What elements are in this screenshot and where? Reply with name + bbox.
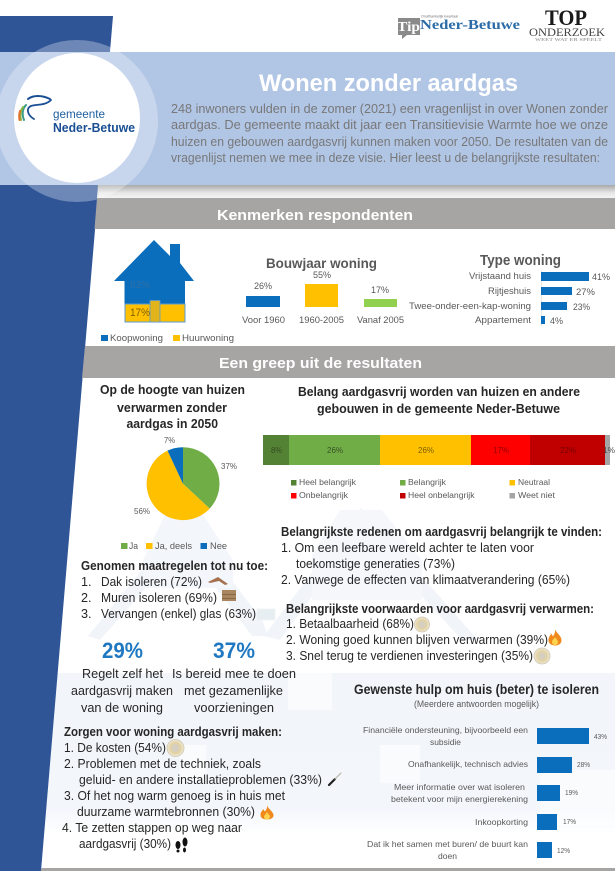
house chart: koop/huur: 17% xyxy=(130,307,150,319)
text: zorgen: 2. Problemen met de techniek, zoals xyxy=(64,757,261,771)
stacked bar chart: 1% xyxy=(603,445,615,455)
stacked bar legend xyxy=(291,477,556,500)
chart values: 43% xyxy=(594,732,607,741)
section band: Een greep uit de resultaten: Een greep uit de resultaten xyxy=(219,355,422,372)
text: voorwaarden xyxy=(286,602,594,663)
stacked bar legend: Neutraal xyxy=(518,477,550,487)
text: zorgen: duurzame warmtebronnen (30%) xyxy=(77,805,255,819)
icon: coin xyxy=(534,648,550,664)
text: redenen: 2. Vanwege de effecten van klimaatverandering (65%) xyxy=(281,573,570,587)
stacked bar chart: 8% xyxy=(271,445,282,455)
chart subtitle: (Meerdere antwoorden mogelijk) xyxy=(414,699,539,709)
stacked bar legend: Onbelangrijk xyxy=(299,490,349,500)
icon: footprints xyxy=(176,838,188,852)
chart values: 19% xyxy=(565,788,578,797)
logo: Top Onderzoek: ONDERZOEK xyxy=(529,25,605,39)
hero panel xyxy=(0,52,615,198)
section band: Kenmerken respondenten xyxy=(94,198,615,229)
text: zorgen: aardgasvrij (30%) xyxy=(79,837,171,851)
chart: Type woning: Vrijstaand huis xyxy=(469,271,531,281)
intro text xyxy=(171,101,609,165)
text: redenen: toekomstige generaties (73%) xyxy=(296,557,455,571)
stat text xyxy=(71,667,173,715)
chart: Type woning: Twee-onder-een-kap-woning xyxy=(409,301,531,311)
house huurwoning xyxy=(125,300,185,322)
stat text: met gezamenlijke xyxy=(184,684,283,698)
chart values: 17% xyxy=(563,817,576,826)
house legend xyxy=(101,333,234,343)
text: zorgen: geluid- en andere installatieproblemen (33%) xyxy=(79,773,322,787)
logo: Top Onderzoek: TOP xyxy=(545,5,587,30)
stat text: aardgasvrij maken xyxy=(71,684,173,698)
chart labels: betekent voor mijn energierekening xyxy=(391,794,528,804)
chart: Bouwjaar woning: 1960-2005 xyxy=(299,314,344,325)
text: genomen maatregelen xyxy=(81,559,268,621)
stacked bar legend: Heel belangrijk xyxy=(299,477,357,487)
stacked bar legend: Weet niet xyxy=(518,490,556,500)
icon: roof xyxy=(208,577,228,585)
chart labels: subsidie xyxy=(430,737,461,747)
stat text: voorzieningen xyxy=(194,701,274,715)
chart: Bouwjaar woning: 55% xyxy=(313,269,331,280)
chart: Type woning: 27% xyxy=(576,287,595,297)
icon: flame xyxy=(260,805,274,820)
chart: Bouwjaar woning: 26% xyxy=(254,280,272,291)
hero shadow xyxy=(97,185,615,198)
icon: wall xyxy=(222,590,236,601)
icon: screwdriver xyxy=(329,773,341,785)
section band: Een greep uit de resultaten xyxy=(82,346,615,378)
house chart: koop/huur xyxy=(101,240,234,343)
chart labels: doen xyxy=(438,851,457,861)
stat text: Is bereid mee te doen xyxy=(172,667,296,681)
chart: Bouwjaar woning xyxy=(242,256,404,325)
logo: Top Onderzoek: WEET WAT ER SPEELT xyxy=(535,37,602,42)
chart: Gewenste hulp xyxy=(354,682,607,861)
stat: 29% xyxy=(71,638,173,715)
heading: Op de hoogte: Op de hoogte van huizen xyxy=(100,382,245,397)
stat: 37% xyxy=(172,638,296,715)
chart: Type woning: Type woning xyxy=(480,253,561,269)
pie legend: Ja, deels xyxy=(155,541,192,551)
pie legend: Nee xyxy=(210,541,227,551)
text: zorgen xyxy=(62,725,322,851)
text: zorgen: 3. Of het nog warm genoeg is in huis met xyxy=(64,789,285,803)
chart: Type woning xyxy=(409,253,610,326)
chart bars xyxy=(537,728,589,858)
chart labels: Onafhankelijk, technisch advies xyxy=(408,759,528,769)
chart values xyxy=(557,732,607,855)
heading: Belang aardgasvrij xyxy=(298,384,580,416)
chart labels: Inkoopkorting xyxy=(475,817,528,827)
logo: Tip Neder-Betuwe xyxy=(397,14,520,39)
text: redenen: 1. Om een leefbare wereld achter te laten voor xyxy=(281,541,534,555)
text: zorgen: 1. De kosten (54%) xyxy=(64,741,166,755)
bottom band xyxy=(41,868,615,871)
stacked bar chart: 26% xyxy=(418,445,434,455)
chart: Type woning: Appartement xyxy=(475,315,531,325)
pie chart: 56% xyxy=(134,507,150,516)
logo: Tip Neder-Betuwe: Neder-Betuwe xyxy=(420,18,520,33)
text: genomen maatregelen: Muren isoleren (69%) xyxy=(101,591,217,605)
chart labels: Meer informatie over wat isoleren xyxy=(394,782,525,792)
text: genomen maatregelen: Vervangen (enkel) glas (63%) xyxy=(101,607,256,621)
chart labels: Dat ik het samen met buren/ de buurt kan xyxy=(367,839,528,849)
text: voorwaarden: 1. Betaalbaarheid (68%) xyxy=(286,617,414,631)
stacked bar chart: 17% xyxy=(493,445,509,455)
text: zorgen: Zorgen voor woning aardgasvrij maken: xyxy=(64,725,282,739)
intro text: aardgas. De gemeente maakt dit jaar een Transitievisie Warmte hoe we onze xyxy=(171,117,608,132)
icon: glass xyxy=(257,609,275,620)
icon: coin xyxy=(414,617,430,632)
house koopwoning xyxy=(114,240,194,304)
logo: Tip Neder-Betuwe: Onafhankelijk kwartaal xyxy=(421,14,458,18)
chart heading: Gewenste hulp om huis (beter) te isoleren xyxy=(354,682,599,697)
section band: Kenmerken respondenten: Kenmerken respondenten xyxy=(217,207,413,224)
chart: Bouwjaar woning: Vanaf 2005 xyxy=(357,314,404,325)
heading: Belang aardgasvrij: gebouwen in de gemeente Neder-Betuwe xyxy=(317,401,560,416)
pie legend: Ja xyxy=(129,541,139,551)
pie legend xyxy=(121,541,227,551)
intro text: 248 inwoners vulden in de zomer (2021) een vragenlijst in over Wonen zonder xyxy=(171,101,609,116)
icon: flame xyxy=(548,629,562,646)
chart values: 28% xyxy=(577,760,590,769)
text: genomen maatregelen: 3. xyxy=(81,607,92,621)
chart: Type woning: 41% xyxy=(592,272,610,282)
pie chart: 37% xyxy=(221,462,237,471)
stacked bar chart: 22% xyxy=(560,445,576,455)
chart: Type woning: Rijtjeshuis xyxy=(488,286,531,296)
logo text: gemeente xyxy=(53,109,105,121)
chart labels xyxy=(363,725,528,861)
house legend: Koopwoning xyxy=(110,333,163,343)
chart: Type woning: 4% xyxy=(550,316,563,326)
text: genomen maatregelen: Genomen maatregelen tot nu toe: xyxy=(81,559,268,573)
text: genomen maatregelen: Dak isoleren (72%) xyxy=(101,575,202,589)
text: voorwaarden: 3. Snel terug te verdienen investeringen (35%) xyxy=(286,649,533,663)
stat text xyxy=(172,667,296,715)
logo: Tip Neder-Betuwe: Tip xyxy=(397,20,420,35)
heading: Op de hoogte xyxy=(100,382,245,431)
logo mark xyxy=(19,96,51,120)
title: Wonen zonder aardgas xyxy=(259,70,518,97)
text: voorwaarden: Belangrijkste voorwaarden voor aardgasvrij verwarmen: xyxy=(286,602,594,616)
logo: Top Onderzoek xyxy=(529,5,605,42)
stat text: Regelt zelf het xyxy=(82,667,163,681)
house chart: koop/huur: 83% xyxy=(130,280,150,291)
house legend: Huurwoning xyxy=(182,333,234,343)
background watermark houses xyxy=(40,508,615,833)
pie chart xyxy=(121,436,237,551)
pie chart: 7% xyxy=(164,436,175,445)
chart: Type woning: 23% xyxy=(573,302,590,312)
logo circle: Neder-Betuwe xyxy=(53,121,135,135)
chart values: 12% xyxy=(557,846,570,855)
text: genomen maatregelen: 1. xyxy=(81,575,92,589)
chart: Bouwjaar woning: Bouwjaar woning xyxy=(266,256,377,271)
stacked bar legend: Belangrijk xyxy=(408,477,447,487)
text: redenen xyxy=(281,525,602,587)
stacked bar chart xyxy=(263,435,615,500)
chart: Bouwjaar woning: 17% xyxy=(371,284,389,295)
stat text: van de woning xyxy=(81,701,163,715)
stat: 37%: 37% xyxy=(213,638,255,663)
stacked bar legend: Heel onbelangrijk xyxy=(408,490,475,500)
text: zorgen: 4. Te zetten stappen op weg naar xyxy=(62,821,242,835)
heading: Op de hoogte: aardgas in 2050 xyxy=(126,416,218,431)
stat: 29%: 29% xyxy=(102,638,143,663)
stacked bar chart: 26% xyxy=(327,445,343,455)
chart labels: Financiële ondersteuning, bijvoorbeeld een xyxy=(363,725,528,735)
heading: Op de hoogte: verwarmen zonder xyxy=(117,400,227,415)
heading: Belang aardgasvrij: Belang aardgasvrij worden van huizen en andere xyxy=(298,384,580,399)
logo circle xyxy=(0,40,158,202)
blue side strip xyxy=(0,16,113,871)
text: voorwaarden: 2. Woning goed kunnen blijven verwarmen (39%) xyxy=(286,633,548,647)
text: genomen maatregelen: 2. xyxy=(81,591,92,605)
chart: Bouwjaar woning: Voor 1960 xyxy=(242,314,285,325)
icon: coin xyxy=(167,740,184,756)
